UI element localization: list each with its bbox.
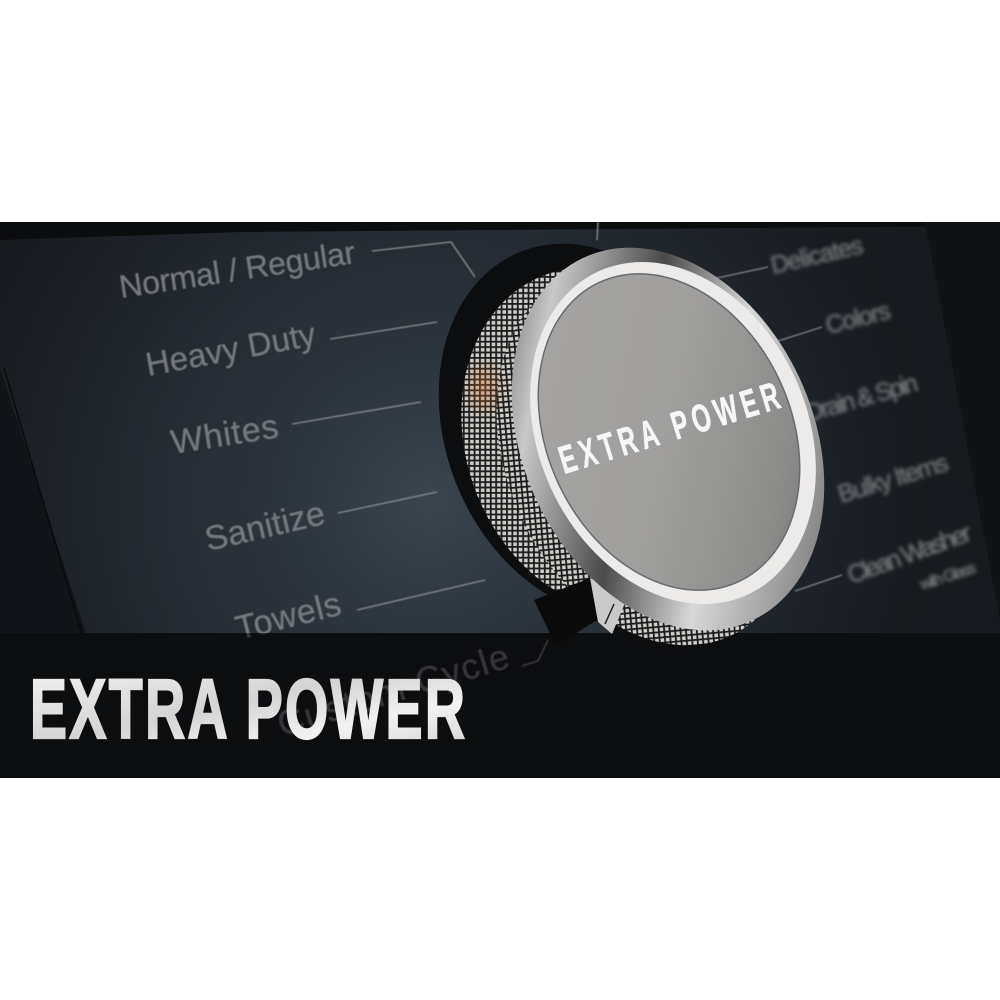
label: Heavy Duty: Heavy Duty <box>143 315 319 383</box>
label: Towels: Towels <box>232 585 345 648</box>
knob label: EXTRA POWER: EXTRA POWER <box>554 374 785 482</box>
left cycle labels <box>117 234 514 745</box>
label: Whites: Whites <box>168 407 281 462</box>
right cycle labels, out of focus <box>768 231 978 594</box>
right leader lines <box>717 267 842 591</box>
label: with Glass: with Glass <box>917 560 978 594</box>
pointer notch <box>534 578 628 646</box>
steel bezel <box>452 196 884 682</box>
control panel background <box>0 222 1000 778</box>
infographic canvas <box>0 221 1000 778</box>
knurled side wall <box>414 221 858 695</box>
label: Normal / Regular: Normal / Regular <box>117 234 358 305</box>
left leader lines <box>292 222 598 666</box>
label: Drain & Spin: Drain & Spin <box>802 369 921 428</box>
label: Custom Cycle: Custom Cycle <box>272 635 514 745</box>
label: Sanitize: Sanitize <box>201 494 329 559</box>
label: Clean Washer: Clean Washer <box>843 519 975 590</box>
knob shroud <box>385 197 850 699</box>
label: Delicates: Delicates <box>768 231 866 280</box>
knob face <box>489 231 849 633</box>
title: EXTRA POWER: EXTRA POWER <box>30 664 465 757</box>
label: Colors: Colors <box>823 297 893 340</box>
label: Bulky Items: Bulky Items <box>835 449 952 509</box>
bottom title band <box>0 633 1000 778</box>
dial knob <box>385 196 884 699</box>
white light ring <box>476 215 870 651</box>
